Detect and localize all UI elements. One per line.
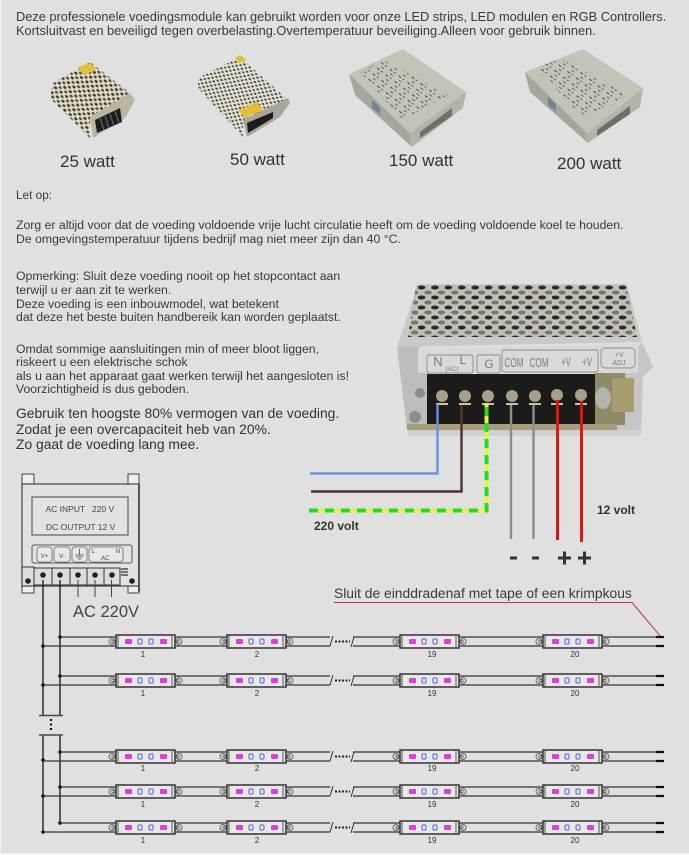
led driver diagram: V+ bbox=[41, 554, 49, 560]
power supply photo: COM bbox=[504, 355, 524, 370]
led row 5: 20 bbox=[571, 836, 580, 845]
power supply photo: (AC) bbox=[445, 366, 459, 373]
wires: 12 volt bbox=[511, 400, 582, 542]
wires: 220 volt bbox=[309, 403, 486, 510]
intro text bbox=[16, 9, 666, 38]
power supply photo: ADJ bbox=[612, 360, 626, 367]
note: opmerking: dat deze het beste buiten handbereik kan worden geplaatst. bbox=[16, 310, 341, 324]
bus wires bbox=[39, 580, 63, 834]
note: let op bbox=[16, 188, 623, 246]
product: 25 watt bbox=[50, 62, 135, 171]
led row 1: 19 bbox=[428, 650, 437, 659]
led row 4: 2 bbox=[255, 800, 260, 809]
note: let op: Let op: bbox=[16, 188, 52, 202]
polarity symbols bbox=[510, 552, 591, 564]
led driver diagram: AC bbox=[101, 556, 110, 562]
power supply photo: +V bbox=[561, 355, 571, 369]
note: opmerking: terwijl u er aan zit te werken. bbox=[16, 283, 171, 297]
callout: einddraden bbox=[334, 585, 661, 637]
led row 4 bbox=[43, 785, 664, 809]
power supply photo: +V bbox=[582, 355, 592, 369]
note: vermogen: Gebruik ten hoogste 80% vermogen van de voeding. bbox=[16, 405, 339, 421]
label: 50 watt: 50 watt bbox=[230, 150, 285, 169]
led row 3 bbox=[43, 750, 664, 773]
label: 150 watt: 150 watt bbox=[389, 151, 454, 170]
callout: einddraden: Sluit de einddradenaf met tape of een krimpkous bbox=[334, 585, 632, 601]
note: let op: De omgevingstemperatuur tijdens bedrijf mag niet meer zijn dan 40 °C. bbox=[16, 232, 401, 246]
power supply photo: L bbox=[460, 353, 467, 367]
label: 25 watt: 25 watt bbox=[60, 152, 115, 171]
power supply photo: +V bbox=[615, 352, 624, 359]
product: 50 watt bbox=[198, 55, 290, 169]
led row 1: 2 bbox=[255, 650, 260, 659]
led row 4: 1 bbox=[141, 800, 146, 809]
led driver diagram: DC OUTPUT 12 V bbox=[46, 522, 116, 532]
intro text: Deze professionele voedingsmodule kan gebruikt worden voor onze LED strips, LED modulen en RGB Controllers. bbox=[16, 9, 666, 24]
led row 5: 19 bbox=[428, 836, 437, 845]
led row 1: 1 bbox=[141, 650, 146, 659]
led driver diagram: N bbox=[116, 549, 120, 555]
led row 3: 19 bbox=[428, 764, 437, 773]
note: vermogen: Zo gaat de voeding lang mee. bbox=[16, 436, 199, 452]
led row 5: 1 bbox=[141, 836, 146, 845]
product: 150 watt bbox=[349, 49, 466, 170]
led row 1: 20 bbox=[571, 650, 580, 659]
note: vermogen: Zodat je een overcapaciteit heb van 20%. bbox=[16, 421, 271, 437]
note: vermogen bbox=[16, 405, 339, 452]
note: opmerking: riskeert u een elektrische schok bbox=[16, 355, 188, 369]
led row 4: 20 bbox=[571, 800, 580, 809]
led driver diagram: 220 V bbox=[92, 504, 115, 514]
power supply photo bbox=[397, 284, 653, 436]
led row 3: 2 bbox=[255, 764, 260, 773]
led row 2: 1 bbox=[141, 689, 146, 698]
led row 1 bbox=[43, 635, 664, 659]
led driver diagram bbox=[22, 474, 139, 597]
power supply photo: G bbox=[484, 357, 494, 371]
label: 200 watt: 200 watt bbox=[557, 154, 622, 173]
label: 12 volt: 12 volt bbox=[597, 503, 635, 517]
note: opmerking: Opmerking: Sluit deze voeding nooit op het stopcontact aan bbox=[16, 269, 340, 283]
note: opmerking: als u aan het apparaat gaat werken terwijl het aangesloten is! bbox=[16, 369, 349, 383]
led driver diagram: V- bbox=[59, 554, 65, 560]
note: opmerking bbox=[16, 269, 349, 396]
label: 220 volt: 220 volt bbox=[314, 519, 359, 533]
led row 2: 19 bbox=[428, 689, 437, 698]
product: 200 watt bbox=[525, 49, 643, 173]
note: let op: Zorg er altijd voor dat de voeding voldoende vrije lucht circulatie heeft om de voeding voldoende koel te houden. bbox=[16, 218, 623, 232]
intro text: Kortsluitvast en beveiligd tegen overbelasting.Overtemperatuur beveiliging.Alleen voor gebruik binnen. bbox=[16, 23, 596, 38]
note: opmerking: Voorzichtigheid is dus geboden. bbox=[16, 382, 189, 396]
power supply photo: N bbox=[433, 354, 443, 369]
led driver diagram: L bbox=[91, 549, 95, 555]
led row 2: 20 bbox=[571, 689, 580, 698]
led row 5 bbox=[43, 821, 664, 845]
led driver diagram: AC INPUT bbox=[46, 504, 85, 514]
led row 3: 20 bbox=[571, 764, 580, 773]
led row 5: 2 bbox=[255, 836, 260, 845]
note: opmerking: Deze voeding is een inbouwmodel, wat betekent bbox=[16, 297, 279, 311]
led row 4: 19 bbox=[428, 800, 437, 809]
led row 2: 2 bbox=[255, 689, 260, 698]
note: opmerking: Omdat sommige aansluitingen min of meer bloot liggen, bbox=[16, 342, 319, 356]
led row 3: 1 bbox=[141, 764, 146, 773]
label: ac 220v: AC 220V bbox=[73, 603, 139, 621]
power supply photo: COM bbox=[530, 355, 548, 370]
led row 2 bbox=[43, 674, 664, 698]
